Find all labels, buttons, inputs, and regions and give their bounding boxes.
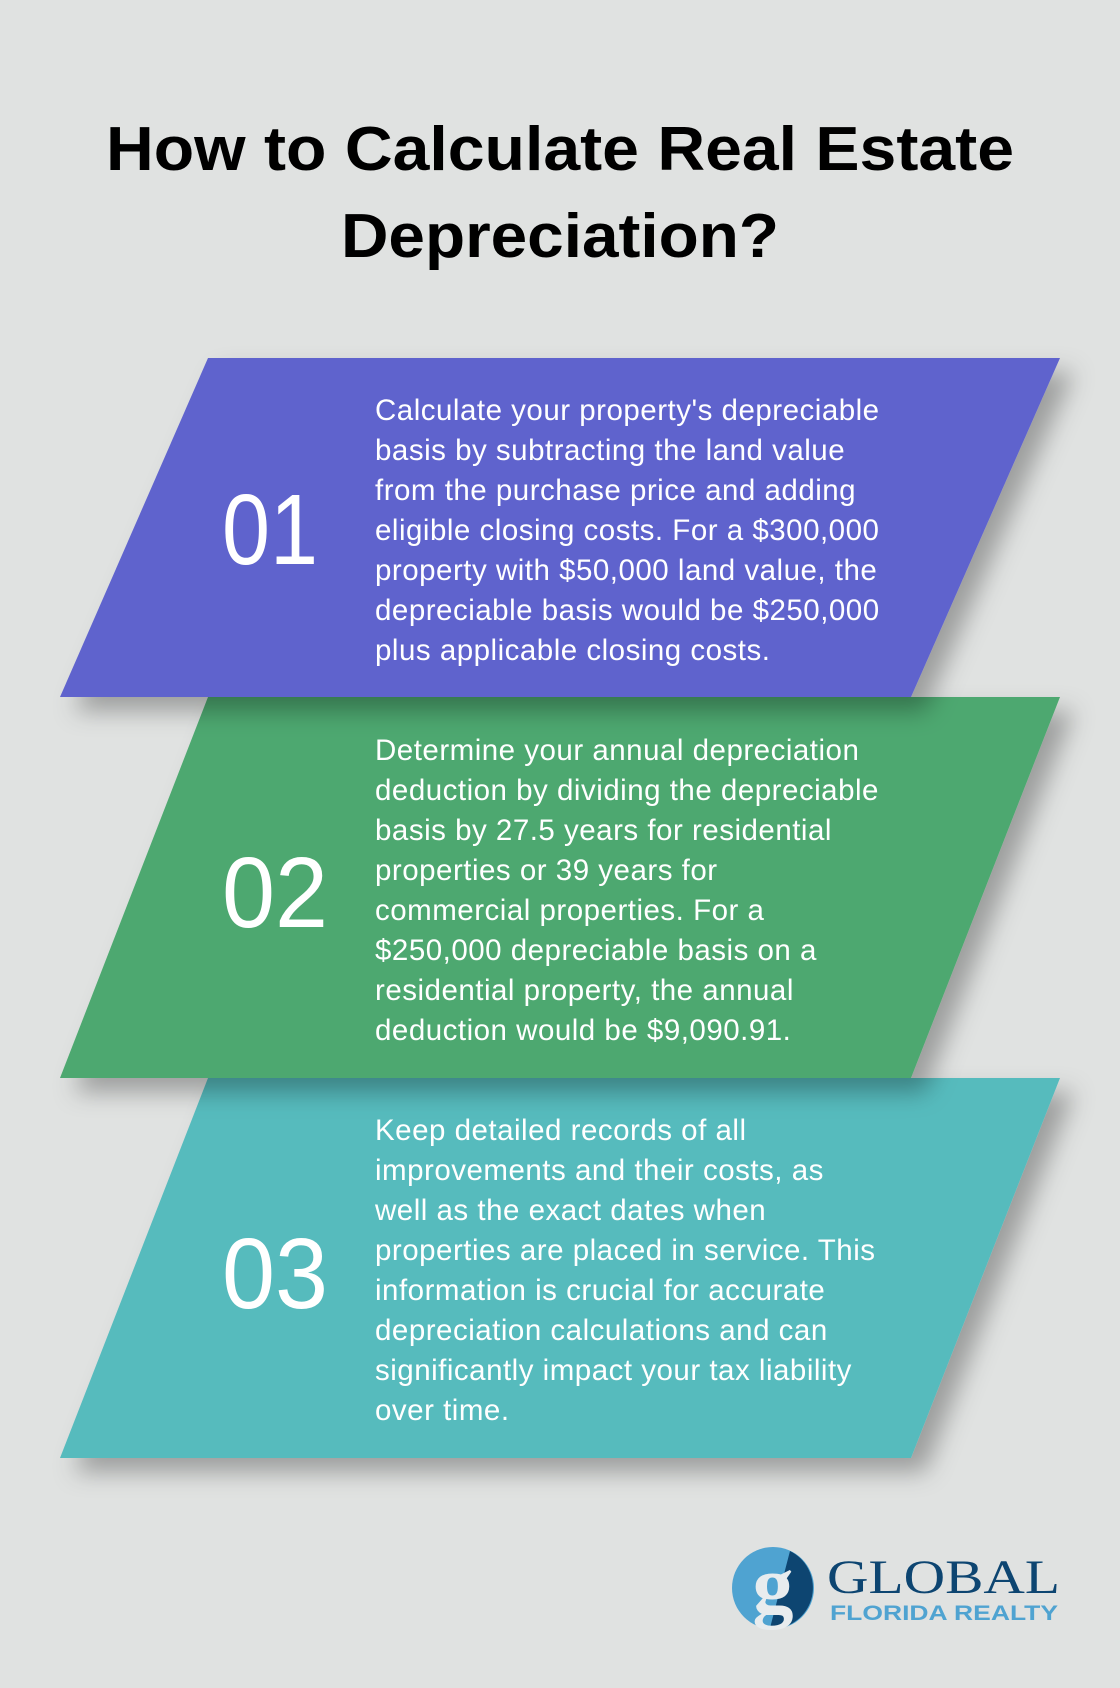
text block 03: improvements and their costs, as (375, 1154, 824, 1187)
text block 03: significantly impact your tax liability (375, 1354, 852, 1387)
text block 02 (375, 734, 879, 1047)
text block 02: $250,000 depreciable basis on a (375, 934, 817, 967)
text block 02: deduction would be $9,090.91. (375, 1014, 791, 1047)
text block 01 (375, 394, 880, 667)
logo: FLORIDA REALTY (830, 1602, 1058, 1625)
text block 03: depreciation calculations and can (375, 1314, 828, 1347)
icon: g circle (732, 1539, 814, 1630)
text block 01: depreciable basis would be $250,000 (375, 594, 880, 627)
number 01: 01 (222, 474, 318, 586)
text block 03: information is crucial for accurate (375, 1274, 825, 1307)
text block 01: plus applicable closing costs. (375, 634, 770, 667)
text block 01: basis by subtracting the land value (375, 434, 845, 467)
logo (732, 1539, 1060, 1630)
text block 03 (374, 1114, 876, 1427)
title: How to Calculate Real Estate (106, 115, 1014, 184)
text block 02: commercial properties. For a (375, 894, 765, 927)
icon: g circle: g (752, 1539, 794, 1630)
text block 01: eligible closing costs. For a $300,000 (375, 514, 879, 547)
title (106, 115, 1014, 271)
text block 02: basis by 27.5 years for residential (375, 814, 832, 847)
text block 03: Keep detailed records of all (375, 1114, 747, 1147)
text block 02: properties or 39 years for (375, 854, 718, 887)
text block 01: from the purchase price and adding (375, 474, 856, 507)
panel: step 03 (60, 1078, 1060, 1458)
logo wordmark: GLOBAL (827, 1551, 1060, 1604)
panel: step 01 (60, 358, 1060, 697)
text block 03: properties are placed in service. This (375, 1234, 876, 1267)
text block 03: well as the exact dates when (374, 1194, 766, 1227)
text block 03: over time. (375, 1394, 510, 1427)
number 03: 03 (222, 1218, 328, 1330)
text block 01: Calculate your property's depreciable (375, 394, 880, 427)
text block 01: property with $50,000 land value, the (375, 554, 877, 587)
text block 02: deduction by dividing the depreciable (375, 774, 879, 807)
panel: step 02 (60, 697, 1060, 1078)
text block 02: Determine your annual depreciation (375, 734, 859, 767)
text block 02: residential property, the annual (375, 974, 794, 1007)
title: Depreciation? (341, 202, 779, 271)
number 02: 02 (222, 837, 328, 949)
